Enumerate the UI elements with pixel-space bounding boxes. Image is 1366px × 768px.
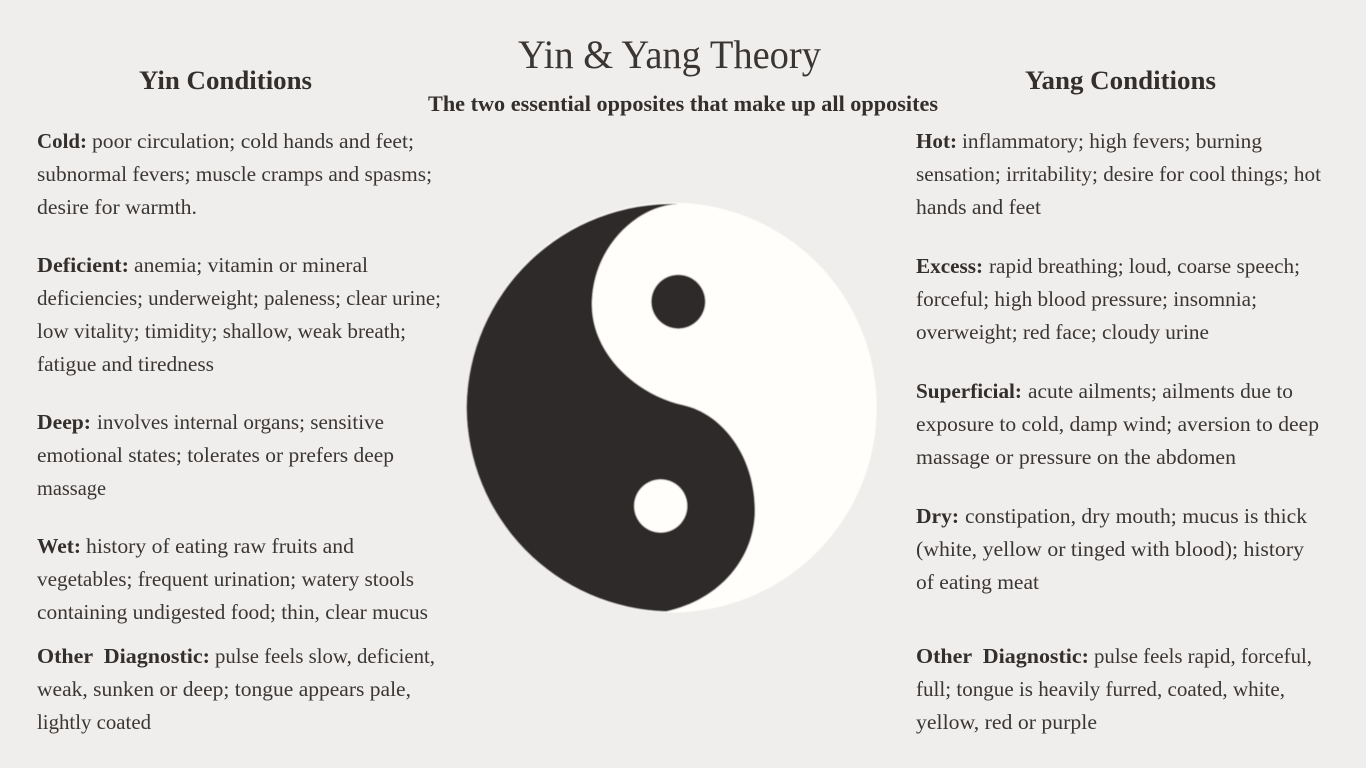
text block: hot: hands and feet: [916, 195, 1041, 219]
text block: other diagnostic (yin): weak, sunken or deep; tongue appears pale,: [37, 677, 411, 701]
text block: other diagnostic (yang): yellow, red or purple: [916, 710, 1097, 734]
text block: excess: [916, 254, 1300, 344]
text block: dry: (white, yellow or tinged with blood); history: [916, 537, 1304, 561]
text block: cold: desire for warmth.: [37, 195, 197, 219]
text block: deficient: fatigue and tiredness: [37, 352, 214, 376]
text block: superficial: exposure to cold, damp wind; aversion to deep: [916, 412, 1319, 436]
text block: deficient: Deficient:: [37, 253, 129, 277]
text block: dry: constipation, dry mouth; mucus is thick: [965, 504, 1307, 528]
text block: other diagnostic (yang): Other Diagnostic:: [916, 644, 1089, 668]
text block: wet: containing undigested food; thin, clear mucus: [37, 600, 428, 624]
text block: wet: [37, 534, 428, 624]
text block: superficial: Superficial:: [916, 379, 1022, 403]
text block: other diagnostic (yin): [37, 644, 435, 734]
text block: hot: sensation; irritability; desire for cool things; hot: [916, 162, 1321, 186]
text block: excess: forceful; high blood pressure; insomnia;: [916, 287, 1257, 311]
text block: wet: vegetables; frequent urination; watery stools: [37, 567, 414, 591]
heading: yin conditions: Yin Conditions: [139, 66, 312, 95]
text block: deep: [37, 410, 394, 500]
text block: excess: rapid breathing; loud, coarse speech;: [989, 254, 1300, 278]
text block: dry: [916, 504, 1307, 594]
text block: hot: Hot:: [916, 129, 957, 153]
text block: wet: history of eating raw fruits and: [86, 534, 354, 558]
yin yang symbol: [467, 202, 877, 612]
text block: deep: Deep:: [37, 410, 91, 434]
text block: superficial: massage or pressure on the abdomen: [916, 445, 1236, 469]
text block: dry: of eating meat: [916, 570, 1039, 594]
text block: deficient: [37, 253, 441, 376]
text block: other diagnostic (yin): Other Diagnostic:: [37, 644, 210, 668]
text block: other diagnostic (yang): pulse feels rapid, forceful,: [1094, 644, 1312, 668]
text block: superficial: acute ailments; ailments due to: [1028, 379, 1293, 403]
text block: deep: involves internal organs; sensitive: [97, 410, 384, 434]
text block: superficial: [916, 379, 1319, 469]
text block: dry: Dry:: [916, 504, 959, 528]
text block: deep: massage: [37, 476, 106, 500]
text block: hot: inflammatory; high fevers; burning: [962, 129, 1262, 153]
text block: other diagnostic (yin): lightly coated: [37, 710, 151, 734]
subtitle: The two essential opposites that make up all opposites: [428, 91, 938, 116]
text block: other diagnostic (yin): pulse feels slow, deficient,: [215, 644, 435, 668]
text block: deficient: low vitality; timidity; shallow, weak breath;: [37, 319, 406, 343]
text block: excess: Excess:: [916, 254, 983, 278]
text block: deep: emotional states; tolerates or prefers deep: [37, 443, 394, 467]
text block: other diagnostic (yang): full; tongue is heavily furred, coated, white,: [916, 677, 1285, 701]
text block: excess: overweight; red face; cloudy urine: [916, 320, 1209, 344]
text block: cold: Cold:: [37, 129, 87, 153]
text block: deficient: anemia; vitamin or mineral: [134, 253, 368, 277]
text block: hot: [916, 129, 1321, 219]
text block: wet: Wet:: [37, 534, 81, 558]
heading: yang conditions: Yang Conditions: [1025, 66, 1216, 95]
text block: cold: poor circulation; cold hands and feet;: [92, 129, 414, 153]
title: Yin & Yang Theory: [518, 32, 821, 77]
text block: deficient: deficiencies; underweight; paleness; clear urine;: [37, 286, 441, 310]
text block: cold: subnormal fevers; muscle cramps and spasms;: [37, 162, 432, 186]
text block: cold: [37, 129, 432, 219]
text block: other diagnostic (yang): [916, 644, 1312, 734]
